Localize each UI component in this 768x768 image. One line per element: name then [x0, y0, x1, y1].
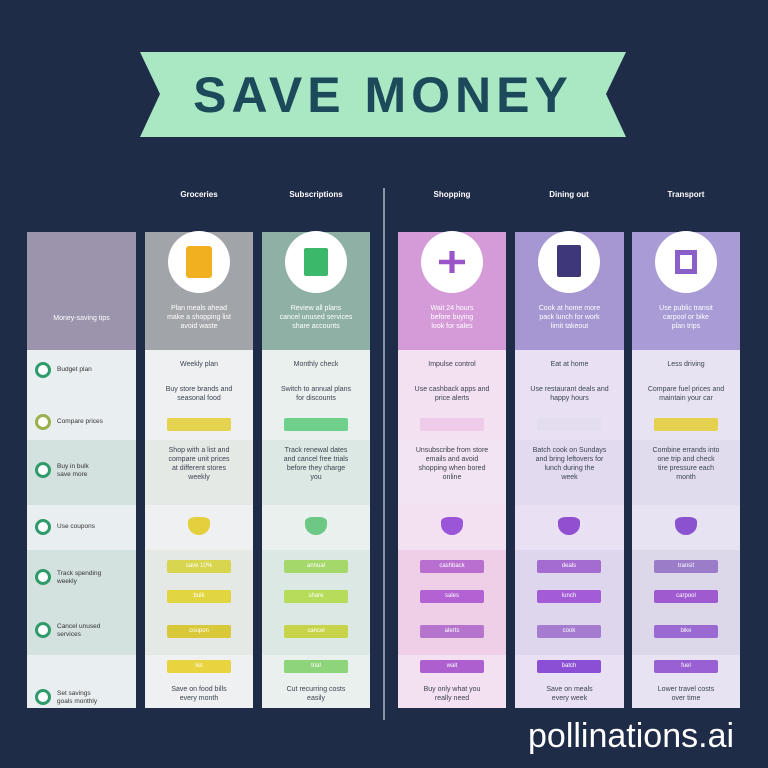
panel: groceries: seasonal food	[177, 395, 221, 402]
icon: transport	[655, 231, 717, 293]
column headers: Groceries	[180, 190, 218, 199]
panel: transport: month	[676, 474, 696, 481]
panel: dining out: pack lunch for work	[539, 314, 600, 321]
icon: groceries	[168, 231, 230, 293]
panel: transport: Compare fuel prices and	[648, 386, 724, 393]
panel: groceries: coupon	[189, 628, 209, 634]
panel: subscriptions	[262, 232, 370, 708]
panel: transport: Lower travel costs	[658, 686, 714, 693]
panel: subscriptions: Review all plans	[291, 305, 341, 312]
panel: groceries: bulk	[193, 593, 204, 599]
panel: dining out: cook	[563, 628, 575, 634]
panel: label column: services	[57, 631, 81, 638]
panel: groceries: Weekly plan	[180, 361, 218, 368]
title text: SAVE MONEY	[193, 67, 573, 123]
panel: transport: transit	[678, 563, 694, 569]
panel: subscriptions: cancel unused services	[280, 314, 352, 321]
panel: subscriptions: Cut recurring costs	[287, 686, 345, 693]
panel: groceries: save 10%	[186, 563, 212, 569]
panel: subscriptions: and cancel free trials	[284, 456, 348, 463]
panel: label column: Use coupons	[57, 523, 95, 530]
panel: shopping: alerts	[445, 628, 459, 634]
panel: dining out: deals	[562, 563, 576, 569]
panel: shopping: cashback	[439, 563, 465, 569]
panel: dining out: and bring leftovers for	[536, 456, 603, 463]
panel: groceries: Plan meals ahead	[171, 305, 227, 312]
panel: shopping: before buying	[431, 314, 473, 321]
panel: transport: maintain your car	[659, 395, 713, 402]
panel: transport: over time	[672, 695, 700, 702]
panel: groceries: at different stores	[172, 465, 226, 472]
panel: subscriptions: Switch to annual plans	[281, 386, 351, 393]
panel: shopping: online	[443, 474, 461, 481]
panel: dining out: lunch	[562, 593, 576, 599]
panel: groceries: Buy store brands and	[166, 386, 232, 393]
column headers: Dining out	[549, 190, 589, 199]
panel: groceries: make a shopping list	[167, 314, 231, 321]
title banner	[140, 52, 626, 137]
panel: shopping: really need	[435, 695, 469, 702]
panel: shopping: Use cashback apps and	[415, 386, 489, 393]
panel: transport: plan trips	[672, 323, 700, 330]
panel: dining out: Cook at home more	[539, 305, 600, 312]
panel: label column	[27, 232, 136, 708]
panel: dining out: Use restaurant deals and	[530, 386, 609, 393]
panel: transport: Combine errands into	[653, 447, 719, 454]
panel: transport: carpool	[676, 593, 696, 599]
panel: shopping	[398, 232, 506, 708]
panel: subscriptions: share	[308, 593, 324, 599]
panel: dining out: batch	[562, 663, 576, 669]
panel: shopping: Wait 24 hours	[431, 305, 473, 312]
panel: label column: goals monthly	[57, 698, 97, 705]
panel: dining out: week	[561, 474, 578, 481]
panel: shopping: price alerts	[435, 395, 469, 402]
panel: shopping: shopping when bored	[419, 465, 485, 472]
panel: label column: Set savings	[57, 690, 91, 697]
panel: transport: tire pressure each	[658, 465, 714, 472]
divider	[383, 188, 385, 720]
panel: subscriptions: for discounts	[296, 395, 336, 402]
panel: dining out: Batch cook on Sundays	[533, 447, 606, 454]
panel: transport: Use public transit	[659, 305, 713, 312]
panel: subscriptions: annual	[307, 563, 325, 569]
icon: subscriptions	[285, 231, 347, 293]
panel: groceries: compare unit prices	[168, 456, 230, 463]
panel: label column: save more	[57, 471, 87, 478]
panel: shopping: wait	[447, 663, 457, 669]
panel: transport: carpool or bike	[663, 314, 709, 321]
panel: groceries: avoid waste	[181, 323, 217, 330]
panel: label column: Budget plan	[57, 366, 92, 373]
column headers	[180, 190, 704, 199]
panel: subscriptions: Monthly check	[294, 361, 338, 368]
panel: shopping: Unsubscribe from store	[416, 447, 488, 454]
column headers: Transport	[668, 190, 704, 199]
panel: dining out: Save on meals	[546, 686, 593, 693]
column headers: Shopping	[434, 190, 470, 199]
icon: dining out	[538, 231, 600, 293]
panel: shopping: emails and avoid	[426, 456, 478, 463]
panel: dining out: lunch during the	[545, 465, 594, 472]
panel: transport	[632, 232, 740, 708]
panel: groceries: Save on food bills	[171, 686, 227, 693]
panel: label column: Cancel unused	[57, 623, 100, 630]
panel: subscriptions: cancel	[307, 628, 325, 634]
panel: subscriptions: you	[310, 474, 322, 481]
panel: subscriptions: share accounts	[292, 323, 340, 330]
panel: transport: fuel	[681, 663, 691, 669]
panel: subscriptions: Track renewal dates	[285, 447, 347, 454]
panel: dining out	[515, 232, 624, 708]
panel: dining out: limit takeout	[551, 323, 588, 330]
panel: groceries: list	[195, 663, 203, 669]
column headers: Subscriptions	[289, 190, 343, 199]
panel: label column: Track spending	[57, 570, 101, 577]
panel: dining out: happy hours	[550, 395, 589, 402]
panel: groceries: Shop with a list and	[169, 447, 229, 454]
panel: label column: Buy in bulk	[57, 463, 89, 470]
panel: transport: bike	[680, 628, 692, 634]
panel: label column: weekly	[57, 578, 77, 585]
panel: shopping: Buy only what you	[424, 686, 480, 693]
panel: shopping: look for sales	[431, 323, 473, 330]
panel: subscriptions: before they charge	[287, 465, 345, 472]
panel: dining out: every week	[552, 695, 587, 702]
panel: shopping: Impulse control	[428, 361, 476, 368]
panel: transport: Less driving	[667, 361, 705, 368]
panel: subscriptions: trial	[311, 663, 321, 669]
panel: label column: Compare prices	[57, 418, 103, 425]
panel: subscriptions: easily	[307, 695, 325, 702]
panel: label column: Money-saving tips	[53, 315, 110, 322]
watermark: pollinations.ai	[528, 717, 734, 755]
panel: dining out: Eat at home	[551, 361, 588, 368]
panel: transport: one trip and check	[657, 456, 715, 463]
icon: shopping	[421, 231, 483, 293]
panel: shopping: sales	[445, 593, 459, 599]
panel: groceries	[145, 232, 253, 708]
panel: groceries: every month	[180, 695, 218, 702]
panel: groceries: weekly	[188, 474, 210, 481]
